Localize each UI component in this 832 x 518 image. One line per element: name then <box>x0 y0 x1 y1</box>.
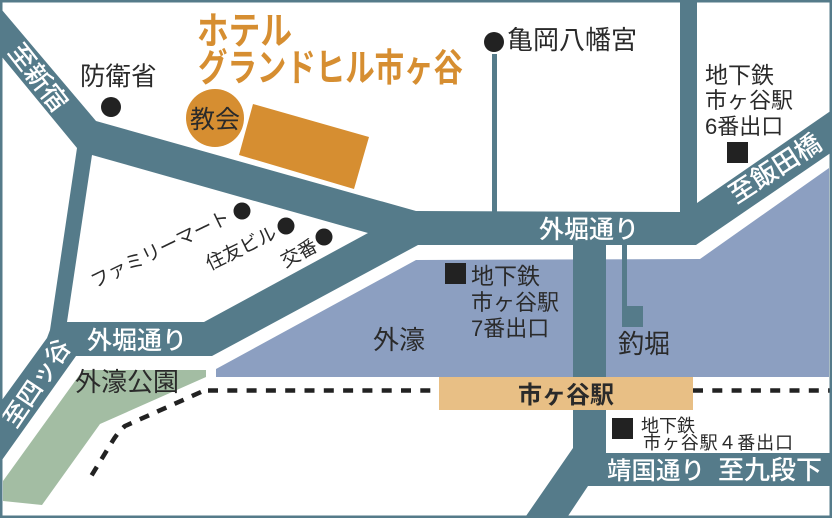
landmark: 防衛省 <box>80 63 157 117</box>
subway exit 4: 市ヶ谷駅４番出口 <box>643 433 793 453</box>
subway exit 7: 7番出口 <box>471 316 549 341</box>
landmark: ファミリーマート: ファミリーマート <box>88 207 234 293</box>
subway exit 7 <box>445 263 559 341</box>
station: 市ヶ谷駅 <box>439 377 693 410</box>
road label: 至新宿: 至新宿 <box>2 37 74 117</box>
landmark: 住友ビル: 住友ビル <box>202 222 280 275</box>
station: 市ヶ谷駅: 市ヶ谷駅 <box>518 382 614 409</box>
subway exit 7: 市ヶ谷駅 <box>471 290 559 315</box>
road label: 至四ッ谷: 至四ッ谷 <box>0 334 77 433</box>
road label: 至九段下: 至九段下 <box>718 455 822 485</box>
church: 教会 <box>190 106 240 134</box>
subway exit 7: 地下鉄 <box>471 263 540 289</box>
subway exit 4 <box>612 416 793 453</box>
road label: 外堀通り lower: 外堀通り <box>87 327 187 355</box>
road label: 至飯田橋: 至飯田橋 <box>723 128 827 209</box>
road label: 外堀通り upper: 外堀通り <box>539 216 639 244</box>
label: 外濠公園: 外濠公園 <box>75 367 179 397</box>
moat: blue water area <box>216 168 829 377</box>
hotel name <box>197 11 463 90</box>
hotel building <box>239 104 369 189</box>
subway exit 4: 地下鉄 <box>641 416 695 436</box>
landmark: 亀岡八幡宮: 亀岡八幡宮 <box>507 25 637 55</box>
park: 外濠公園 <box>3 370 206 505</box>
subway exit 6: 地下鉄 <box>705 62 774 88</box>
railway: dashed line <box>90 390 830 478</box>
church <box>186 89 244 147</box>
subway exit 6: 市ヶ谷駅 <box>705 88 793 113</box>
landmark: 交番 <box>277 228 332 272</box>
subway exit 6: 6番出口 <box>705 114 783 139</box>
label: 釣堀: 釣堀 <box>618 329 670 359</box>
label: 外濠: 外濠 <box>373 325 425 355</box>
landmark: 交番: 交番 <box>277 235 321 272</box>
road label: 靖国通り: 靖国通り <box>607 457 705 485</box>
landmark: 防衛省: 防衛省 <box>80 63 157 91</box>
subway exit 6 <box>705 62 793 163</box>
hotel name: グランドヒル市ヶ谷 <box>198 48 463 90</box>
hotel name: ホテル <box>197 11 292 53</box>
